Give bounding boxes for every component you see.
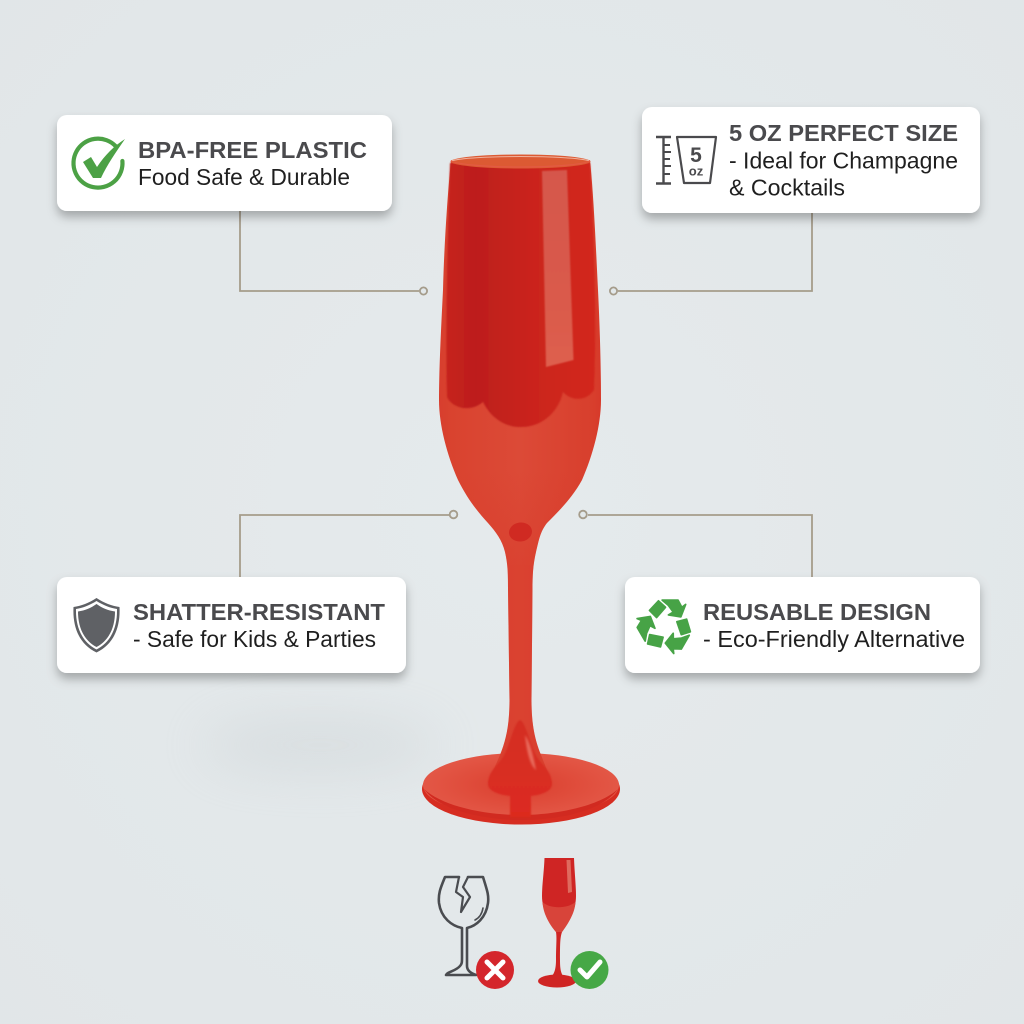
foot bbox=[422, 753, 620, 824]
foot cone bbox=[488, 720, 552, 817]
heading: REUSABLE DESIGN bbox=[703, 599, 931, 625]
bowl and stem silhouette bbox=[439, 160, 601, 767]
description: - Eco-Friendly Alternative bbox=[703, 626, 965, 652]
panel: shatter-resistant bbox=[57, 577, 406, 673]
panel: BPA-free plastic bbox=[57, 115, 392, 211]
cone highlight bbox=[525, 735, 536, 770]
icon: recycling arrows bbox=[633, 600, 696, 656]
panel: 5 oz perfect size bbox=[642, 107, 980, 213]
main red champagne flute bbox=[422, 150, 620, 824]
comparison: red flute bbox=[538, 858, 608, 989]
soft glass shadow on surface bbox=[200, 719, 440, 771]
panel: reusable design bbox=[625, 577, 980, 673]
heading: 5 OZ PERFECT SIZE bbox=[729, 120, 958, 146]
heading: SHATTER-RESISTANT bbox=[133, 599, 385, 625]
description: Food Safe & Durable bbox=[138, 164, 350, 190]
description: - Safe for Kids & Parties bbox=[133, 626, 376, 652]
icon: green check badge bbox=[570, 951, 608, 989]
icon: shield bbox=[73, 598, 120, 652]
icon: cracked wine glass outline bbox=[439, 877, 488, 975]
icon: measuring cup: 5 bbox=[690, 144, 702, 167]
connector: BPA-free to glass bbox=[240, 211, 427, 295]
description line 1: - Ideal for Champagne bbox=[729, 148, 958, 174]
comparison: broken glass bbox=[439, 877, 514, 989]
icon: measuring cup bbox=[656, 137, 716, 184]
icon: green check in circle bbox=[73, 139, 125, 188]
connector: shatter-resistant to glass bbox=[240, 511, 457, 577]
heading: BPA-FREE PLASTIC bbox=[138, 137, 367, 163]
rim opening bbox=[450, 154, 590, 168]
description line 2: & Cocktails bbox=[729, 174, 845, 200]
upper bowl dark reflection bbox=[446, 163, 595, 427]
icon: small red flute bbox=[538, 858, 576, 988]
connector: 5 oz to glass bbox=[610, 213, 812, 295]
icon: red X badge bbox=[476, 951, 514, 989]
window highlight bbox=[542, 170, 574, 367]
neck dimple bbox=[508, 521, 533, 543]
connector: reusable design to glass bbox=[579, 511, 812, 577]
icon: measuring cup: oz bbox=[689, 164, 704, 178]
